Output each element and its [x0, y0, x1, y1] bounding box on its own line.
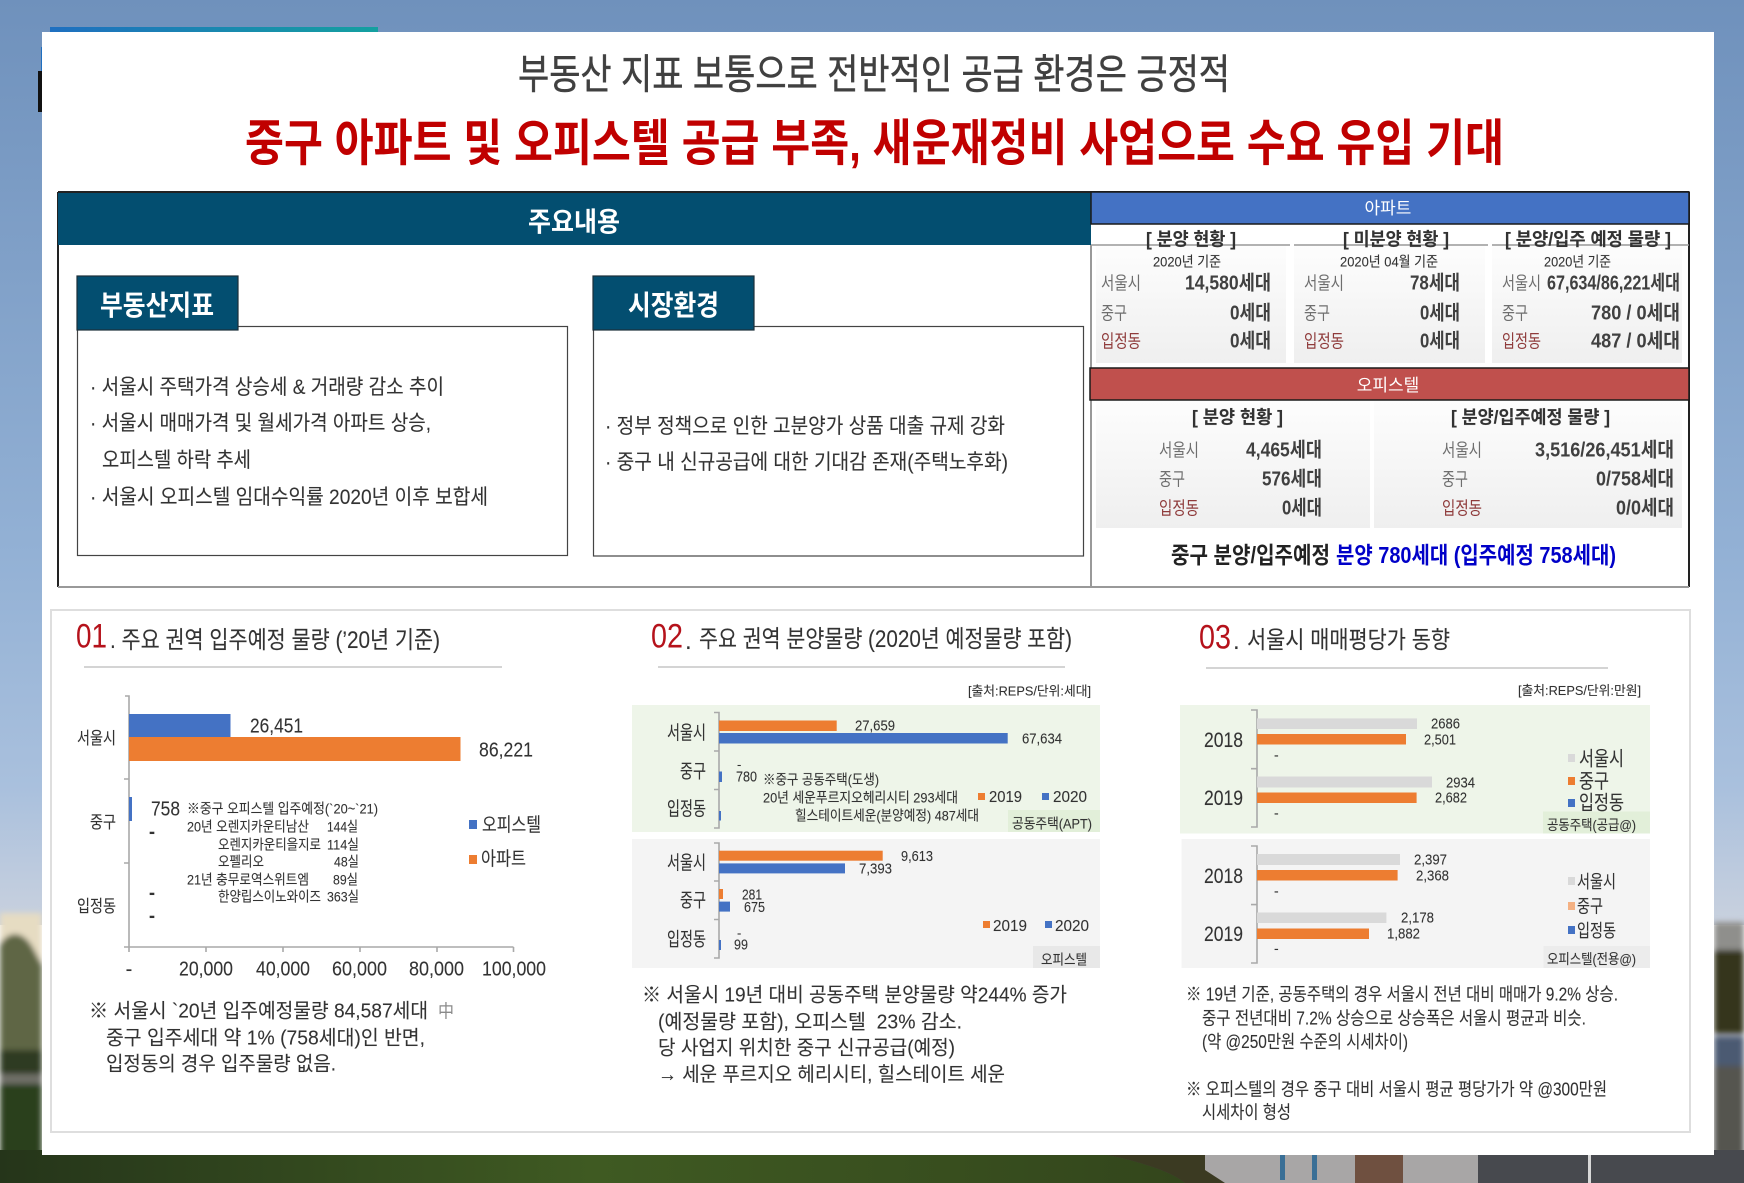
- 오피스텔 분양/입주예정 물량: 3,516/26,451세대: [1535, 438, 1674, 462]
- heading 02: 주요 권역 분양물량 (2020년 예정물량 포함): [699, 626, 1072, 653]
- chart note: 중구 오피스텔 입주예정: 한양립스이노와이즈: [218, 888, 321, 904]
- note 02: 당 사업지 위치한 중구 신규공급(예정): [658, 1036, 955, 1060]
- callout: 중구 분양/입주예정: [1171, 542, 1616, 568]
- heading 01: . 주요 권역 입주예정 물량 (’20년 기준): [110, 627, 440, 654]
- bar chart 01: -: [149, 882, 155, 902]
- panel: 부동산지표: 오피스텔 하락 추세: [102, 449, 251, 472]
- 오피스텔 분양/입주예정 물량: 0/758세대: [1596, 468, 1674, 490]
- chart note: 중구 공동주택: 20년 세운푸르지오헤리시티 293세대: [763, 790, 958, 806]
- 오피스텔 분양 현황: 입정동: [1159, 498, 1199, 518]
- 아파트 미분양 현황: [ 미분양 현황 ]: [1343, 230, 1449, 250]
- legend 02a: 2020: [1053, 789, 1087, 806]
- panel: 시장환경: [593, 276, 1084, 556]
- chart note: 중구 오피스텔 입주예정: 144실: [327, 818, 358, 834]
- tag: 공동주택(APT): 공동주택(APT): [1012, 816, 1092, 832]
- bar chart: 공동주택(공급@): [1180, 705, 1650, 834]
- chart note: 중구 오피스텔 입주예정: 21년 충무로역스위트엠: [187, 872, 309, 888]
- bar chart: 오피스텔(전용@): 2,397: [1414, 852, 1447, 868]
- 아파트 미분양 현황: 서울시: [1304, 274, 1344, 294]
- bar chart: 공동주택(APT): -: [737, 757, 741, 772]
- 아파트 분양 현황: 0세대: [1230, 302, 1271, 324]
- 아파트 분양/입주 예정 물량: 487 / 0세대: [1591, 330, 1680, 352]
- bar chart: 공동주택(APT): 27,659: [855, 718, 895, 734]
- tag: 오피스텔(전용@): [1544, 946, 1650, 968]
- 아파트 미분양 현황: 중구: [1304, 304, 1330, 324]
- 아파트 미분양 현황: 2020년 04월 기준: [1340, 254, 1438, 270]
- 아파트 분양 현황: 입정동: [1101, 332, 1141, 352]
- 오피스텔 분양 현황: 중구: [1159, 470, 1185, 490]
- legend 01: 오피스텔: [482, 814, 541, 836]
- bar chart 01: 80,000: [409, 958, 464, 980]
- heading: 주요내용: [58, 193, 1091, 245]
- chart note: 중구 오피스텔 입주예정: 오렌지카운티을지로: [218, 836, 321, 852]
- 아파트 분양 현황: 서울시: [1101, 274, 1141, 294]
- legend 03a: [1568, 748, 1624, 814]
- bar chart: 오피스텔(전용@): 2,178: [1401, 910, 1434, 926]
- 아파트 분양/입주 예정 물량: 입정동: [1502, 332, 1541, 352]
- legend 03b: 입정동: [1577, 921, 1616, 941]
- heading 02: 02: [651, 618, 683, 656]
- bar chart: 오피스텔(전용@): [1182, 839, 1650, 968]
- bar chart: 오피스텔: 675: [744, 900, 765, 916]
- bar chart: 오피스텔(전용@): -: [1274, 940, 1279, 956]
- 아파트 분양/입주 예정 물량: 중구: [1502, 304, 1528, 324]
- panel: 01 입주예정 물량: [76, 618, 546, 1076]
- 오피스텔 분양 현황: 0세대: [1282, 496, 1322, 520]
- note 02: [642, 984, 1067, 1086]
- legend 02a: 2019: [989, 789, 1022, 806]
- 오피스텔 분양/입주예정 물량: 입정동: [1442, 498, 1482, 518]
- bar chart 01: 60,000: [332, 958, 387, 980]
- 오피스텔 분양/입주예정 물량: [1442, 408, 1674, 520]
- heading 02: .: [685, 628, 692, 655]
- bar chart 01: 40,000: [256, 958, 310, 980]
- heading 01: 01: [76, 618, 107, 656]
- 오피스텔 분양/입주예정 물량: 서울시: [1442, 440, 1482, 460]
- heading 02: [651, 618, 1072, 656]
- 오피스텔 분양 현황: [ 분양 현황 ]: [1192, 408, 1283, 428]
- tag: 오피스텔: 오피스텔: [1041, 952, 1087, 968]
- bar chart: 공동주택(APT): 67,634: [1022, 732, 1062, 748]
- bar chart: 오피스텔: 99: [734, 938, 748, 954]
- panel: 시장환경: · 중구 내 신규공급에 대한 기대감 존재(주택노후화): [605, 451, 1008, 474]
- panel: 부동산지표: · 서울시 매매가격 및 월세가격 아파트 상승,: [90, 412, 431, 435]
- chart note: 중구 오피스텔 입주예정: 114실: [327, 836, 359, 852]
- 오피스텔 분양 현황: [1159, 408, 1322, 520]
- bar chart: 오피스텔: 서울시: [667, 852, 706, 874]
- bar chart: 오피스텔(전용@): 1,882: [1387, 926, 1420, 942]
- 아파트 미분양 현황: 0세대: [1420, 302, 1460, 324]
- bar chart: 오피스텔(전용@): -: [1274, 882, 1279, 898]
- 아파트 분양 현황: 중구: [1101, 304, 1127, 324]
- 아파트 분양 현황: [ 분양 현황 ]: [1146, 230, 1236, 250]
- legend 02b: [983, 918, 1089, 935]
- legend 02a: [978, 789, 1087, 806]
- bar chart: 공동주택(APT): 780: [736, 770, 757, 786]
- 오피스텔 분양 현황: 서울시: [1159, 440, 1199, 460]
- chart note: 중구 오피스텔 입주예정: 오펠리오: [218, 854, 264, 870]
- chart note: 중구 오피스텔 입주예정: 48실: [334, 854, 359, 870]
- panel: bottom analysis frame: [51, 610, 1690, 1132]
- bar chart 01: -: [149, 822, 155, 842]
- tag: 오피스텔: [1033, 946, 1100, 968]
- legend 03a: 입정동: [1579, 792, 1624, 814]
- bar chart 01: 26,451: [250, 716, 303, 738]
- bar chart: 공동주택(공급@): -: [1274, 804, 1279, 820]
- bar chart 01: 20,000: [179, 958, 233, 980]
- note 03: ※ 19년 기준, 공동주택의 경우 서울시 전년 대비 매매가 9.2% 상승.: [1186, 984, 1618, 1004]
- subtitle: 중구 아파트 및 오피스텔 공급 부족, 새운재정비 사업으로 수요 유입 기대: [245, 116, 1504, 172]
- 아파트 분양/입주 예정 물량: [ 분양/입주 예정 물량 ]: [1505, 230, 1671, 250]
- 아파트 분양 현황: [1101, 230, 1271, 352]
- heading 03: .: [1233, 628, 1240, 655]
- legend 02b: 2019: [993, 918, 1027, 935]
- bar chart: 오피스텔(전용@): 2018: [1204, 865, 1243, 888]
- legend 03a: 중구: [1579, 771, 1609, 793]
- heading 03: 03: [1199, 618, 1231, 656]
- note 01: 中: [438, 1002, 454, 1022]
- 아파트 분양/입주 예정 물량: 2020년 기준: [1544, 254, 1611, 270]
- heading 01: [76, 618, 440, 656]
- bar chart: 공동주택(공급@): 2018: [1204, 729, 1243, 752]
- legend 01: [469, 814, 541, 870]
- 아파트 미분양 현황: [1304, 230, 1460, 352]
- panel: 부동산지표: 부동산지표: [100, 290, 214, 321]
- note 03: 시세차이 형성: [1202, 1102, 1291, 1122]
- 아파트 분양 현황: 2020년 기준: [1153, 254, 1221, 270]
- heading 03: [1199, 618, 1450, 656]
- legend 03a: 서울시: [1579, 748, 1624, 770]
- panel: 오피스텔: 오피스텔: [1357, 376, 1419, 395]
- 아파트 분양/입주 예정 물량: 780 / 0세대: [1591, 302, 1680, 324]
- bar chart: 오피스텔: [632, 839, 1100, 968]
- bar chart: 오피스텔: 9,613: [901, 849, 933, 865]
- chart note: 중구 공동주택: ※중구 공동주택(도생): [763, 772, 879, 788]
- panel: main content frame: [58, 192, 1689, 587]
- 오피스텔 분양 현황: 576세대: [1262, 468, 1322, 490]
- bar chart: 공동주택(공급@): 2,682: [1435, 790, 1467, 806]
- chart note: 중구 오피스텔 입주예정: [187, 800, 378, 904]
- 아파트 미분양 현황: 0세대: [1420, 330, 1460, 352]
- panel: 아파트: [1091, 192, 1689, 363]
- note 03: 중구 전년대비 7.2% 상승으로 상승폭은 서울시 평균과 비슷.: [1202, 1008, 1586, 1028]
- panel: 시장환경: 시장환경: [628, 290, 719, 321]
- bar chart: 오피스텔: -: [737, 926, 741, 940]
- bar chart: 오피스텔: 중구: [680, 890, 706, 912]
- 오피스텔 분양 현황: 4,465세대: [1246, 438, 1322, 462]
- panel: 03 매매평당가: [1180, 618, 1650, 1122]
- bar chart 01: [77, 696, 546, 980]
- chart note: 중구 오피스텔 입주예정: 20년 오렌지카운티남산: [187, 818, 309, 834]
- chart note: 중구 공동주택: [763, 772, 979, 824]
- chart note: 중구 오피스텔 입주예정: ※중구 오피스텔 입주예정(`20~`21): [187, 800, 378, 816]
- bar chart: 공동주택(공급@): 2019: [1204, 787, 1243, 810]
- note 03: (약 @250만원 수준의 시세차이): [1202, 1032, 1408, 1052]
- chart note: 중구 공동주택: 힐스테이트세운(분양예정) 487세대: [795, 808, 979, 824]
- 아파트 분양/입주 예정 물량: [1502, 230, 1680, 352]
- panel: 02 분양물량: [632, 618, 1100, 1086]
- heading: 주요내용: 주요내용: [528, 208, 620, 238]
- note 01: 중구 입주세대 약 1% (758세대)인 반면,: [106, 1026, 425, 1050]
- callout: 중구 분양/입주예정: 분양 780세대 (입주예정 758세대): [1336, 542, 1616, 568]
- note 02: (예정물량 포함), 오피스텔 23% 감소.: [658, 1010, 962, 1034]
- bar chart 01: 서울시: [77, 729, 116, 748]
- bar chart: 오피스텔: 7,393: [859, 862, 892, 878]
- 아파트 분양 현황: 14,580세대: [1185, 272, 1271, 294]
- chart note: 중구 오피스텔 입주예정: 363실: [327, 888, 359, 904]
- bar chart 01: 86,221: [479, 740, 533, 762]
- note 01: [89, 1000, 454, 1076]
- panel: 시장환경: · 정부 정책으로 인한 고분양가 상품 대출 규제 강화: [605, 415, 1005, 438]
- chart note: 중구 오피스텔 입주예정: 89실: [333, 872, 358, 888]
- bar chart: 공동주택(APT): 중구: [680, 762, 706, 782]
- bar chart: 오피스텔: 입정동: [667, 928, 706, 950]
- panel: 부동산지표: · 서울시 주택가격 상승세 & 거래량 감소 추이: [90, 376, 444, 399]
- note 01: ※ 서울시 `20년 입주예정물량 84,587세대: [89, 1000, 428, 1022]
- bar chart 01: 입정동: [77, 897, 116, 916]
- bar chart 01: 100,000: [482, 958, 546, 980]
- 아파트 분양 현황: 0세대: [1230, 330, 1271, 352]
- title: 부동산 지표 보통으로 전반적인 공급 환경은 긍정적: [518, 52, 1230, 98]
- bar chart: 공동주택(공급@): 2686: [1431, 716, 1460, 732]
- 아파트 미분양 현황: 입정동: [1304, 332, 1344, 352]
- bar chart: 오피스텔: 281: [742, 888, 762, 904]
- bar chart 01: 중구: [90, 813, 116, 832]
- source 03: [출처:REPS/단위:만원]: [1518, 683, 1641, 698]
- legend 03b: 중구: [1577, 896, 1603, 916]
- bar chart: 오피스텔(전용@): 2019: [1204, 923, 1243, 946]
- note 02: → 세운 푸르지오 헤리시티, 힐스테이트 세운: [658, 1063, 1005, 1086]
- panel: 아파트: 아파트: [1365, 199, 1411, 218]
- note 03: ※ 오피스텔의 경우 중구 대비 서울시 평균 평당가가 약 @300만원: [1186, 1080, 1607, 1100]
- 오피스텔 분양/입주예정 물량: 중구: [1442, 470, 1468, 490]
- bar chart: 공동주택(공급@): -: [1274, 746, 1279, 762]
- bar chart: 공동주택(공급@): 2,501: [1424, 732, 1456, 748]
- bar chart: 공동주택(공급@): 2934: [1446, 776, 1475, 792]
- bar chart 01: -: [126, 958, 132, 980]
- legend 03b: 서울시: [1577, 872, 1616, 892]
- 아파트 분양/입주 예정 물량: 67,634/86,221세대: [1547, 272, 1680, 294]
- bar chart: 공동주택(APT): 입정동: [667, 798, 706, 820]
- tag: 공동주택(APT): [1008, 810, 1100, 832]
- note 02: ※ 서울시 19년 대비 공동주택 분양물량 약244% 증가: [642, 984, 1067, 1006]
- source 02: [출처:REPS/단위:세대]: [968, 684, 1091, 698]
- bar chart 01: 758: [151, 798, 180, 820]
- callout: 중구 분양/입주예정: 중구 분양/입주예정: [1171, 542, 1330, 568]
- legend 03b: [1568, 872, 1616, 941]
- legend 02b: 2020: [1055, 918, 1089, 935]
- 아파트 미분양 현황: 78세대: [1410, 272, 1460, 294]
- note 01: 입정동의 경우 입주물량 없음.: [106, 1052, 336, 1076]
- 오피스텔 분양/입주예정 물량: 0/0세대: [1616, 496, 1674, 520]
- bar chart: 오피스텔(전용@): 2,368: [1416, 868, 1449, 884]
- bar chart 01: -: [149, 906, 155, 926]
- heading 03: 서울시 매매평당가 동향: [1247, 627, 1450, 654]
- tag: 공동주택(공급@): [1543, 812, 1650, 834]
- panel: 오피스텔: [1090, 368, 1689, 528]
- bar chart: 공동주택(APT): [632, 705, 1100, 832]
- bar chart: 공동주택(APT): 서울시: [667, 722, 706, 744]
- 아파트 분양/입주 예정 물량: 서울시: [1502, 274, 1541, 294]
- tag: 오피스텔(전용@): 오피스텔(전용@): [1547, 951, 1636, 967]
- panel: 부동산지표: · 서울시 오피스텔 임대수익률 2020년 이후 보합세: [90, 486, 488, 509]
- panel: 부동산지표: [77, 276, 568, 556]
- legend 01: 아파트: [481, 848, 526, 870]
- 오피스텔 분양/입주예정 물량: [ 분양/입주예정 물량 ]: [1451, 408, 1610, 428]
- note 03: [1186, 984, 1618, 1122]
- tag: 공동주택(공급@): 공동주택(공급@): [1547, 817, 1636, 833]
